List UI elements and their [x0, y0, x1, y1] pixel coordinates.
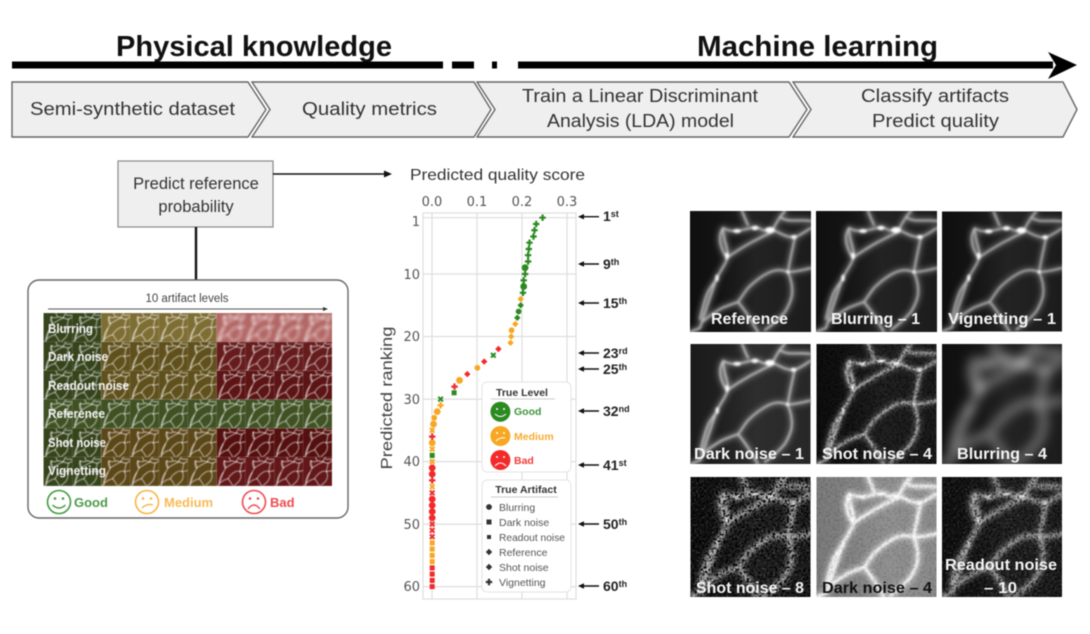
rank annotations: th	[619, 579, 627, 589]
rank annotations: 32	[603, 403, 619, 419]
rank annotations: 50	[603, 516, 619, 532]
image: reference: Reference	[711, 311, 788, 328]
rank annotations: rd	[619, 346, 628, 356]
data points	[429, 214, 546, 589]
legend: true level	[482, 382, 571, 472]
image: readout noise 10	[942, 477, 1062, 597]
chevron: classify and predict: Predict quality	[872, 110, 1000, 131]
row labels	[48, 322, 129, 478]
chevron: quality metrics	[252, 82, 491, 137]
legend: true artifact: Shot noise	[499, 562, 549, 574]
box: predict reference probability: Predict reference	[133, 175, 259, 193]
image: shot noise 8	[690, 477, 810, 597]
arrow: artifact level direction	[48, 307, 328, 311]
image: dark noise 1	[690, 344, 810, 464]
image: dark noise 1: Dark noise – 1	[694, 446, 804, 463]
chevron: train LDA model: Analysis (LDA) model	[547, 110, 734, 131]
y axis labels	[403, 215, 420, 595]
legend: bad	[242, 490, 295, 514]
chart: predicted ranking versus quality score	[379, 195, 577, 599]
row labels: Readout noise	[48, 379, 129, 393]
arrow: timeline from physical knowledge to machine learning	[12, 52, 1077, 79]
image: readout noise 10: – 10	[984, 580, 1017, 597]
rank annotations: 41	[603, 457, 619, 473]
box: predict reference probability	[118, 161, 273, 227]
image: readout noise 10: Readout noise	[945, 557, 1057, 574]
chevron: classify and predict: Classify artifacts	[861, 85, 1009, 106]
row labels: Vignetting	[48, 464, 106, 478]
y axis labels: 1	[412, 215, 420, 230]
legend: true artifact: Blurring	[499, 502, 535, 514]
image: vignetting 1: Vignetting – 1	[948, 311, 1056, 328]
connector: box to artifact panel	[195, 227, 197, 280]
legend: good	[48, 490, 108, 514]
legend: good: Good	[74, 495, 108, 510]
heatmap grid of artifact levels	[44, 313, 332, 486]
chevron: semi-synthetic dataset	[12, 82, 266, 137]
rank annotations: th	[619, 517, 627, 527]
chevron: semi-synthetic dataset: Semi-synthetic dataset	[30, 98, 235, 119]
image: blurring 4: Blurring – 4	[957, 446, 1047, 463]
image: reference	[690, 211, 811, 332]
legend: medium: Medium	[164, 495, 213, 510]
image: dark noise 4: Dark noise – 4	[822, 580, 932, 597]
row labels: Blurring	[48, 322, 93, 336]
rank annotations: th	[619, 362, 627, 372]
legend: medium	[136, 490, 213, 514]
legend: true level: Bad	[514, 455, 534, 467]
chevron: train LDA model: Train a Linear Discriminant	[522, 85, 758, 106]
row labels: Reference	[48, 407, 105, 421]
label: 10 artifact levels: 10 artifact levels	[145, 293, 229, 305]
row labels: Shot noise	[48, 436, 106, 450]
y axis labels: 10	[403, 268, 420, 283]
rank annotations: 15	[603, 295, 619, 311]
arrow: box to quality score	[273, 170, 392, 178]
plot frame and grid	[423, 213, 576, 599]
rank annotations: 60	[603, 578, 619, 594]
image: shot noise 8: Shot noise – 8	[696, 580, 804, 597]
x axis labels: 0.0	[422, 195, 442, 210]
legend: true artifact: Readout noise	[499, 532, 565, 544]
rank annotations: 23	[603, 345, 619, 361]
image: blurring 1: Blurring – 1	[831, 311, 920, 328]
legend: true level: Medium	[514, 431, 554, 443]
y axis labels: 20	[403, 330, 420, 345]
rank annotations: st	[611, 209, 619, 219]
rank annotations: nd	[619, 404, 630, 414]
rank annotations: st	[619, 458, 627, 468]
x axis labels: 0.1	[467, 195, 487, 210]
image: dark noise 4	[816, 477, 936, 597]
rank annotations: th	[611, 257, 619, 267]
legend: bad: Bad	[270, 495, 295, 510]
chevron: quality metrics: Quality metrics	[302, 98, 437, 119]
row labels: Dark noise	[48, 350, 108, 364]
image: blurring 4	[942, 344, 1062, 464]
legend: true artifact: Vignetting	[499, 577, 546, 589]
legend: true artifact: True Artifact	[495, 484, 557, 496]
x axis labels	[422, 195, 577, 210]
rank annotations: 25	[603, 361, 619, 377]
legend: true artifact: Dark noise	[499, 517, 549, 529]
chevron: classify and predict	[793, 82, 1077, 137]
image: shot noise 4	[816, 344, 936, 464]
x axis labels: 0.2	[512, 195, 532, 210]
legend: true level: Good	[514, 406, 541, 418]
legend: true artifact: Reference	[499, 547, 548, 559]
y axis labels: 40	[403, 455, 420, 470]
process chevrons	[12, 82, 1077, 137]
legend: true artifact	[482, 480, 571, 592]
panel: artifact levels	[28, 280, 348, 518]
chevron: train LDA model	[477, 82, 807, 137]
y axis title: Predicted ranking	[379, 326, 396, 470]
rank annotations: th	[619, 296, 627, 306]
rank annotations: 9	[603, 256, 611, 272]
heading: Machine learning: Machine learning	[697, 31, 938, 63]
y axis labels: 50	[403, 518, 420, 533]
x axis labels: 0.3	[557, 195, 577, 210]
box: predict reference probability: probability	[158, 198, 234, 216]
image: shot noise 4: Shot noise – 4	[822, 446, 932, 463]
rank annotations	[578, 208, 630, 594]
legend: true level: True Level	[496, 387, 548, 399]
image: vignetting 1	[942, 212, 1062, 332]
y axis labels: 30	[403, 393, 420, 408]
image: blurring 1	[816, 211, 937, 332]
heading: Physical knowledge: Physical knowledge	[116, 31, 392, 63]
rank annotations: 1	[603, 208, 611, 224]
chart title: predicted quality score: Predicted quality score	[410, 167, 585, 184]
y axis labels: 60	[403, 580, 420, 595]
